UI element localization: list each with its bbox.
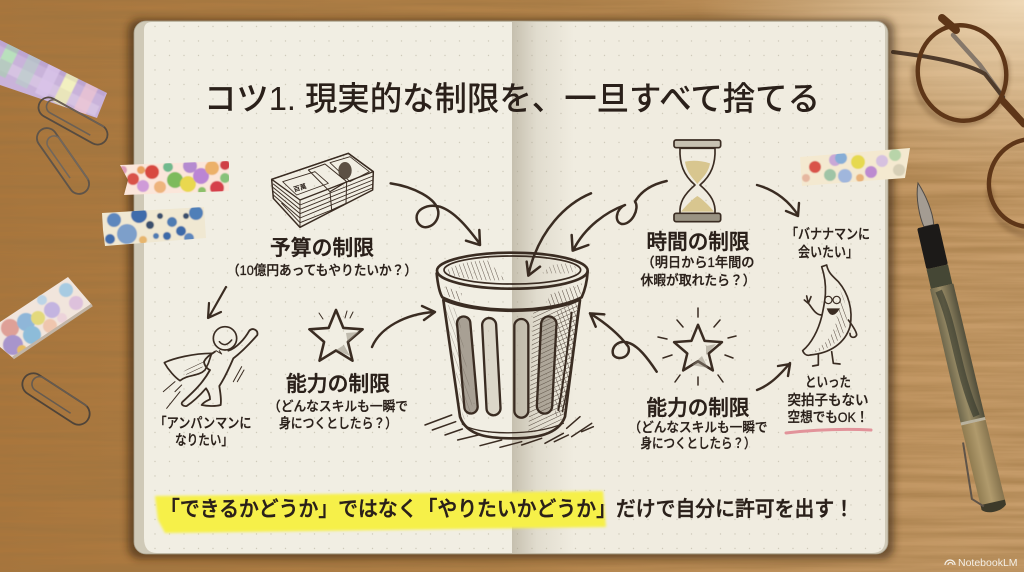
left page [144,22,512,553]
pink underline [786,429,871,433]
text: wish to meet Bananaman: 会いたい」 [798,244,858,260]
text: wish to be Anpanman [154,415,252,448]
page stack edge [134,21,888,554]
portrait note [330,157,369,182]
can slots [456,312,578,418]
text: time question: （明日から1年間の [642,254,754,270]
floor hatching [425,415,593,447]
note left serial [283,172,328,195]
paper clip 2 [33,124,93,198]
washi tape: purple plaid [0,40,107,118]
glasses lenses [907,15,1024,235]
fountain pen [900,180,1007,516]
pen clip [959,441,984,509]
pen cap [961,420,1007,513]
text: ability question left [268,399,408,431]
bottom takeaway text: 「できるかどうか」ではなく「やりたいかどうか」だけで自分に許可を出す！ [160,498,854,521]
paper clips [18,94,111,429]
arrow: right skill to banana [757,363,790,390]
text: even wild fantasies OK: 空想でもOK！ [788,409,868,425]
text: ability question right [628,420,768,451]
pen nib [913,182,934,227]
text: even wild fantasies OK: といった [805,374,851,390]
washi tape roll [0,277,92,358]
arrow: time to banana wish [757,185,799,216]
text: budget question: （10億円あってもやりたいか？） [227,263,417,278]
washi tape: blue floral [102,207,206,246]
text: wish to be Anpanman: 「アンパンマンに [154,415,252,431]
text: even wild fantasies OK: 突拍子もない [788,392,868,408]
text: time question: 休暇が取れたら？） [640,272,756,288]
right page [512,22,885,553]
rim hatching [445,261,505,280]
text: even wild fantasies OK [788,374,868,425]
paper band [308,164,347,192]
icon: stack of banknotes: 百萬 [292,181,308,194]
pen barrel [930,283,985,424]
pen ring [926,264,952,289]
title: コツ1. 現実的な制限を、一旦すべて捨てる [204,80,820,117]
icon: trash can [425,253,593,447]
heading: ability limit right: 能力の制限 [646,397,750,420]
watermark icon [945,560,955,565]
text: ability question right: （どんなスキルも一瞬で [628,420,768,435]
paper clip 3 [18,369,94,429]
arrow: time to trash, outer [572,181,667,251]
washi tape: pastel dots right [800,148,910,186]
glasses [893,15,1024,235]
arrow: budget to trash [391,183,480,245]
heading: budget limit: 予算の制限 [270,237,374,260]
icon: stack of banknotes [272,153,373,227]
yellow highlight [155,491,606,533]
icon: star left [309,310,363,361]
text: ability question left: 身につくとしたら？） [279,416,397,431]
washi tape: colourful dots [120,161,229,195]
icon: star right with rays [658,308,736,385]
can rim [437,272,588,310]
notebook [128,19,894,559]
arrow: budget to hero [208,287,226,318]
arrow: right skill to trash [590,313,657,372]
text: ability question left: （どんなスキルも一瞬で [268,399,408,414]
text: wish to meet Bananaman [786,226,870,260]
glasses shadow [915,60,1024,235]
watermark: NotebookLM [958,557,1018,569]
text: ability question right: 身につくとしたら？） [640,436,756,451]
paper clip 1 [35,94,111,148]
text: wish to meet Bananaman: 「バナナマンに [786,226,870,242]
heading: time limit: 時間の制限 [646,231,750,254]
icon: hourglass [674,140,721,222]
heading: ability limit left: 能力の制限 [286,373,390,396]
glasses temple arms [893,35,1003,97]
can hatching shade [445,302,580,433]
pen grip [917,223,948,269]
can body [443,300,580,438]
icon: flying superhero [163,327,257,408]
icon: banana character [803,265,857,366]
arrow: left skill to trash [372,306,435,347]
text: wish to be Anpanman: なりたい」 [175,432,233,448]
arrow: time to trash, inner [527,193,591,276]
text: time question [640,254,756,288]
